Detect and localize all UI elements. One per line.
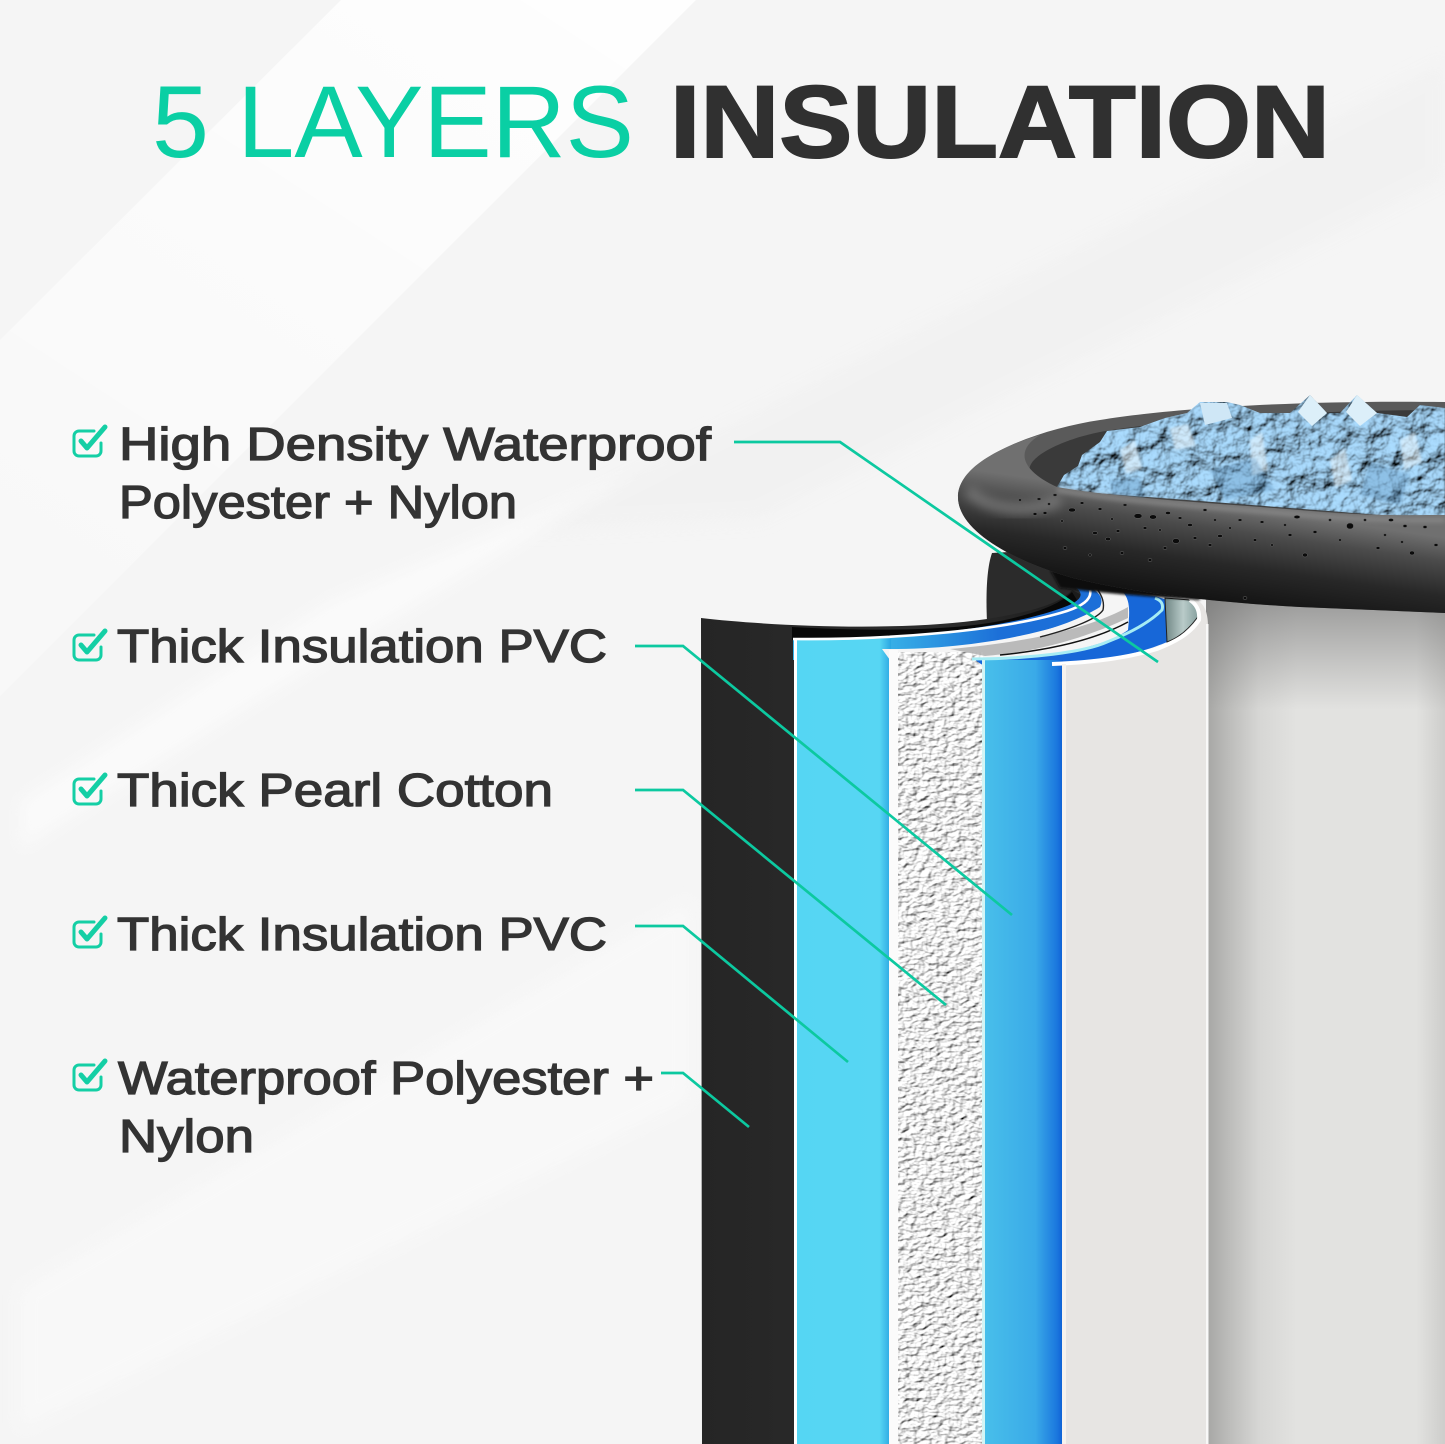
icon: check box <box>74 775 105 804</box>
interior teal wall <box>1165 598 1198 642</box>
cooler rim: front section with water droplets <box>958 435 1445 613</box>
cooler rim: back section <box>958 402 1445 613</box>
icon: check box <box>74 1061 105 1090</box>
layer 4: blue insulation PVC <box>972 592 1167 1444</box>
leader lines from labels to layers <box>635 442 1158 1127</box>
list item: High Density Waterproof Polyester + Nylon: High Density Waterproof <box>119 418 711 470</box>
inner wall of the tub <box>1206 590 1445 1444</box>
list item: Thick Insulation PVC: Thick Insulation PVC <box>117 620 607 672</box>
list item: Waterproof Polyester + Nylon: Waterproof Polyester + <box>118 1052 654 1104</box>
ice cubes <box>1057 395 1445 520</box>
list item: Thick Pearl Cotton: Thick Pearl Cotton <box>117 764 553 816</box>
icon: check box <box>74 427 105 456</box>
title <box>152 65 1330 179</box>
layer 3: pearl cotton <box>882 590 1129 1444</box>
product cutaway illustration <box>701 395 1445 1444</box>
shadow under rim <box>1050 570 1200 600</box>
dark back piece under rim <box>987 550 1095 622</box>
title: INSULATION <box>670 65 1330 179</box>
icon: check box <box>74 631 105 660</box>
layer 2: cyan insulation PVC <box>793 583 1101 1444</box>
list item: High Density Waterproof Polyester + Nylon: Polyester + Nylon <box>119 476 517 528</box>
list item: Waterproof Polyester + Nylon <box>74 1052 654 1162</box>
layer 1: black outer polyester <box>701 590 1092 1444</box>
list item: Thick Insulation PVC (second): Thick Insulation PVC <box>117 908 607 960</box>
title: 5 LAYERS <box>152 65 634 179</box>
layer 5: white inner lining <box>1052 599 1208 1444</box>
list item: Waterproof Polyester + Nylon: Nylon <box>119 1110 254 1162</box>
icon: check box <box>74 918 105 947</box>
list item: High Density Waterproof Polyester + Nylon <box>74 418 711 528</box>
